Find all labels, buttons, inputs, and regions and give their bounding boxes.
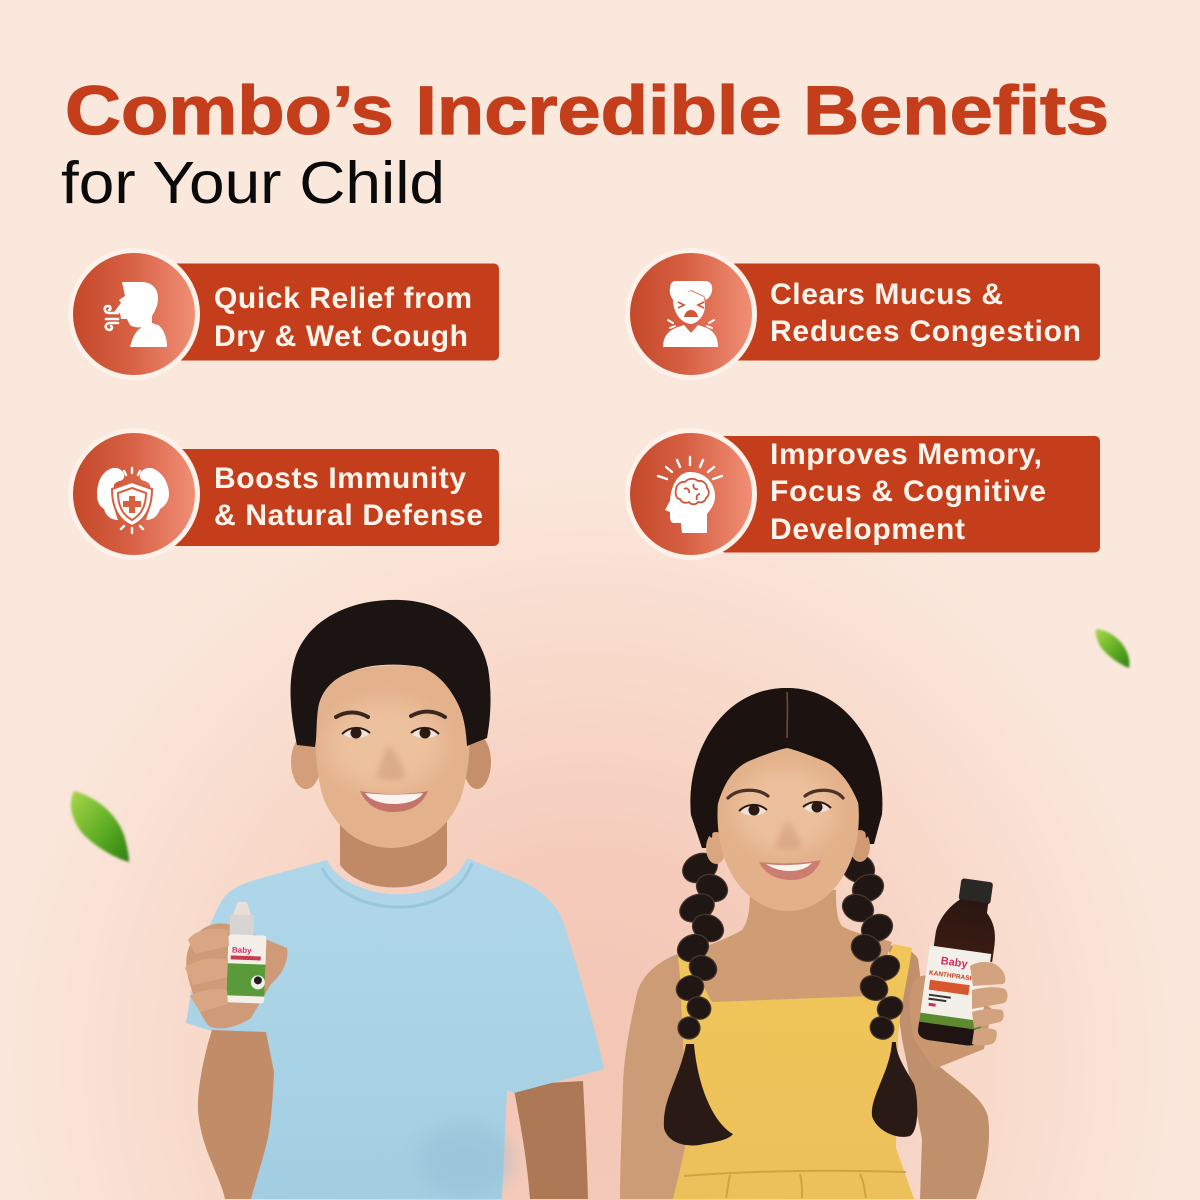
bottle: KANTHPRASH	[929, 970, 975, 983]
nose shade	[376, 745, 406, 780]
palm	[186, 923, 287, 1028]
label: Boosts Immunity	[214, 462, 466, 495]
left braid tuft	[664, 1044, 733, 1145]
smile	[759, 860, 821, 880]
face	[315, 665, 470, 848]
eyes	[342, 728, 439, 738]
label: Improves Memory,	[770, 438, 1042, 471]
girl hand holding syrup bottle	[910, 875, 1008, 1069]
eyes	[739, 802, 831, 816]
banner	[170, 264, 499, 360]
label: & Natural Defense	[214, 499, 483, 532]
label: Development	[770, 513, 965, 546]
label	[214, 282, 472, 353]
icon badge: muscles and shield	[68, 428, 200, 560]
headline: Combo's Incredible Benefits: Combo’s Incredible Benefits	[65, 72, 1109, 149]
hair parting	[786, 692, 788, 738]
cheek highlight	[327, 701, 443, 789]
leaf: right	[1096, 629, 1129, 668]
label: Clears Mucus &	[770, 278, 1003, 311]
label: Focus & Cognitive	[770, 475, 1046, 508]
face	[718, 736, 859, 911]
right braid tuft	[872, 1042, 917, 1137]
label: Reduces Congestion	[770, 315, 1081, 348]
right arm	[513, 1081, 588, 1199]
left braid	[672, 848, 732, 1043]
boy hand holding drops bottle	[185, 901, 287, 1028]
hair top	[691, 688, 882, 838]
bottle: Baby	[232, 945, 252, 955]
label	[770, 438, 1046, 546]
label	[214, 462, 483, 532]
icon badge: coughing man	[68, 248, 200, 380]
smile	[360, 791, 428, 812]
fingers	[185, 929, 229, 1012]
boy	[186, 600, 604, 1199]
benefit: clears mucus	[625, 248, 1100, 380]
cheek highlight	[735, 768, 835, 852]
hair	[291, 600, 491, 747]
banner	[730, 264, 1100, 360]
neck and chest	[674, 890, 892, 1008]
t-shirt	[186, 858, 604, 1199]
left forearm	[198, 1030, 274, 1199]
banner	[170, 449, 499, 546]
bottle	[917, 875, 1003, 1047]
eyebrows	[336, 712, 445, 717]
subheadline: for Your Child: for Your Child	[61, 150, 445, 216]
eyebrows	[728, 790, 843, 798]
palm	[910, 975, 992, 1069]
nose shade	[774, 820, 802, 850]
benefit: immunity	[68, 428, 499, 560]
dress ruffle seam	[684, 1171, 906, 1198]
title	[61, 72, 1109, 216]
right braid	[837, 848, 906, 1043]
neck	[340, 815, 447, 888]
label: Quick Relief from	[214, 282, 472, 315]
shirt shading	[417, 1124, 513, 1196]
fingers	[970, 962, 1008, 1046]
banner	[720, 436, 1100, 552]
left arm	[620, 953, 700, 1199]
icon badge: head with brain	[625, 428, 757, 560]
benefit: quick relief	[68, 248, 499, 380]
benefit: memory	[625, 428, 1100, 560]
icon badge: congested child	[625, 248, 757, 380]
label	[770, 278, 1081, 348]
girl	[620, 688, 989, 1199]
ears	[291, 735, 321, 789]
right arm	[888, 945, 989, 1199]
hair back	[690, 688, 882, 848]
label: Dry & Wet Cough	[214, 320, 468, 353]
bottle: Baby	[940, 955, 969, 971]
shirt collar	[322, 863, 472, 907]
leaf: left	[71, 791, 129, 862]
ears	[706, 832, 726, 864]
dress	[673, 944, 914, 1199]
